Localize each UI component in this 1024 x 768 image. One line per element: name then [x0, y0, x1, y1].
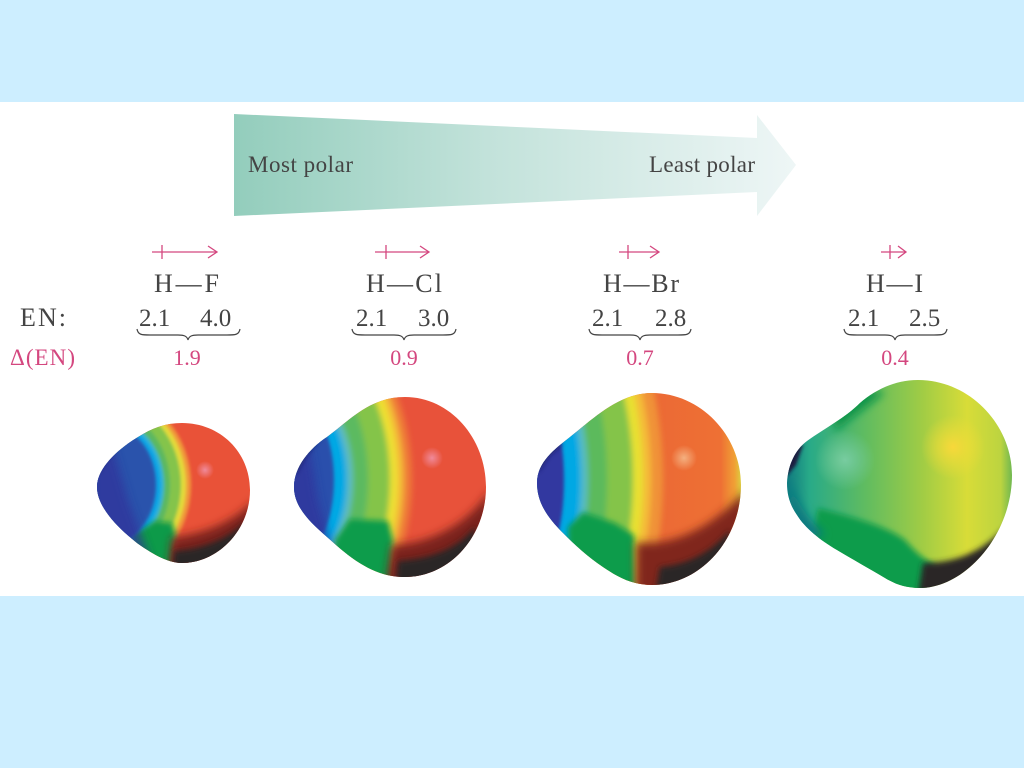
- EN values HCl: 2.1: [356, 305, 387, 332]
- dipole arrow HBr: [619, 245, 659, 259]
- molecule surface: HF: [97, 423, 250, 563]
- molecule surface: HI: [780, 375, 1015, 595]
- formula HI: H—I: [866, 269, 923, 298]
- label: delta EN: Δ(EN): [10, 345, 75, 370]
- delta value HBr: 0.7: [626, 345, 654, 370]
- label: most polar: Most polar: [248, 152, 353, 177]
- EN values HI: 2.5: [909, 305, 940, 332]
- brace HBr: [589, 329, 691, 340]
- delta value HCl: 0.9: [390, 345, 418, 370]
- EN values HI: 2.1: [848, 305, 879, 332]
- label: least polar: Least polar: [649, 152, 755, 177]
- delta value HI: 0.4: [881, 345, 909, 370]
- column: HF: [137, 245, 240, 370]
- polarity arrow: most to least polar: [234, 114, 796, 216]
- dipole arrow HCl: [375, 245, 429, 259]
- column: HBr: [589, 245, 691, 370]
- column: HCl: [352, 245, 456, 370]
- EN values HF: 4.0: [200, 305, 231, 332]
- formula HCl: H—Cl: [366, 269, 442, 298]
- formula HBr: H—Br: [603, 269, 679, 298]
- column: HI: [844, 245, 947, 370]
- EN values HBr: 2.1: [592, 305, 623, 332]
- EN values HCl: 3.0: [418, 305, 449, 332]
- molecule surface: HCl: [294, 397, 486, 577]
- dipole arrow HF: [152, 245, 217, 259]
- formula HF: H—F: [154, 269, 219, 298]
- dipole arrow HI: [881, 245, 906, 259]
- brace HI: [844, 329, 947, 340]
- label: EN: EN:: [20, 303, 66, 332]
- EN values HBr: 2.8: [655, 305, 686, 332]
- white content band: [0, 102, 1024, 596]
- delta value HF: 1.9: [173, 345, 201, 370]
- molecule surface: HBr: [537, 393, 741, 585]
- EN values HF: 2.1: [139, 305, 170, 332]
- brace HF: [137, 329, 240, 340]
- brace HCl: [352, 329, 456, 340]
